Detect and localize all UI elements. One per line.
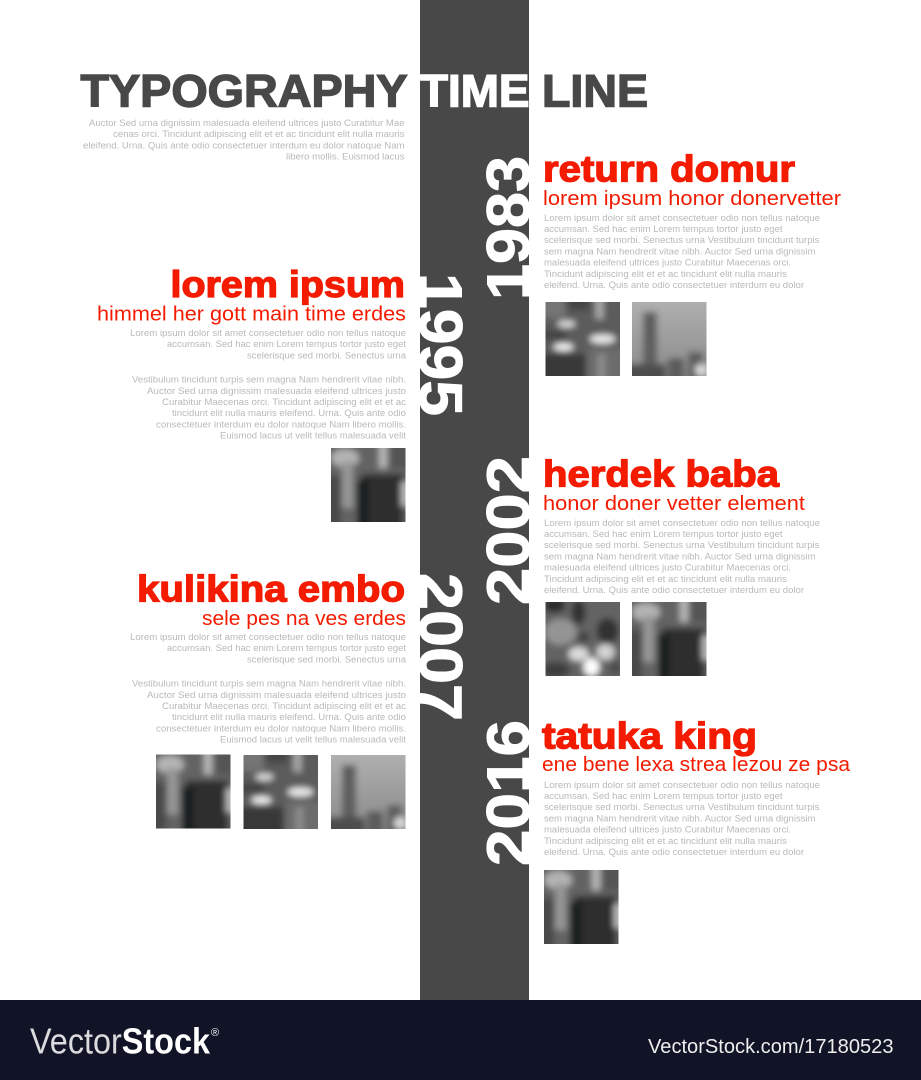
subheading: honor doner vetter element	[543, 492, 805, 515]
body text: consectetuer interdum eu dolor natoque Nam libero mollis.	[156, 419, 406, 429]
photo	[622, 292, 717, 389]
year 2002: 2002	[475, 456, 542, 605]
panel: 1983 return domur	[536, 148, 841, 389]
photo	[536, 592, 630, 687]
registered mark: ®	[211, 1027, 219, 1039]
photo	[234, 745, 328, 842]
body text: malesuada eleifend ultrices justo Curabitur Maecenas orci.	[544, 562, 791, 572]
footer image id: VectorStock.com/17180523	[648, 1036, 894, 1058]
body text: accumsan. Sed hac enim Lorem tempus tortor justo eget	[544, 224, 783, 234]
body text	[544, 518, 820, 595]
body text: Lorem ipsum dolor sit amet consectetuer odio non tellus natoque	[544, 213, 820, 223]
footer bar	[0, 1000, 921, 1080]
body text: malesuada eleifend ultrices justo Curabitur Maecenas orci.	[544, 824, 791, 834]
body text: accumsan. Sed hac enim Lorem tempus tortor justo eget	[544, 529, 783, 539]
body text: accumsan. Sed hac enim Lorem tempus tortor justo eget	[167, 339, 407, 349]
body text: Auctor Sed urna dignissim malesuada eleifend ultrices justo	[147, 690, 406, 700]
photo	[534, 860, 629, 958]
body text: scelerisque sed morbi. Senectus urna	[247, 350, 406, 360]
body text: Curabitur Maecenas orci. Tincidunt adipiscing elit et et ac	[162, 701, 407, 711]
body text: scelerisque sed morbi. Senectus urna Vestibulum tincidunt turpis	[544, 802, 820, 812]
subheading: lorem ipsum honor donervetter	[543, 187, 841, 210]
body text	[544, 780, 820, 857]
panel: 2016 tatuka king	[534, 714, 851, 958]
body text: Lorem ipsum dolor sit amet consectetuer odio non tellus natoque	[544, 518, 820, 528]
body text: eleifend. Urna. Quis ante odio consectetuer interdum eu dolor	[544, 280, 804, 290]
body text: eleifend. Urna. Quis ante odio consectetuer interdum eu dolor	[544, 847, 804, 857]
body text: Lorem ipsum dolor sit amet consectetuer odio non tellus natoque	[130, 632, 406, 642]
heading: tatuka king	[542, 714, 757, 756]
body text: Lorem ipsum dolor sit amet consectetuer odio non tellus natoque	[544, 780, 820, 790]
year 2007: 2007	[407, 573, 474, 721]
body text: Auctor Sed urna dignissim malesuada eleifend ultrices justo	[147, 386, 406, 396]
body text: tincidunt elit nulla mauris eleifend. Urna. Quis ante odio	[172, 408, 406, 418]
year 1983: 1983	[475, 156, 542, 300]
body text: Tincidunt adipiscing elit et et ac tincidunt elit nulla mauris	[544, 836, 788, 846]
intro text block: libero mollis. Euismod lacus	[286, 152, 405, 162]
body text: malesuada eleifend ultrices justo Curabitur Maecenas orci.	[544, 258, 791, 268]
body text: sem magna Nam hendrerit vitae nibh. Auctor Sed urna dignissim	[544, 246, 816, 256]
year 1995: 1995	[407, 273, 474, 416]
title: TIME	[420, 66, 530, 116]
photo	[321, 745, 416, 842]
intro text block	[83, 118, 405, 162]
body text: eleifend. Urna. Quis ante odio consectetuer interdum eu dolor	[544, 585, 804, 595]
panel: 2002 herdek baba	[536, 452, 820, 690]
heading: herdek baba	[543, 452, 780, 494]
subheading: himmel her gott main time erdes	[97, 302, 406, 326]
body text: consectetuer interdum eu dolor natoque Nam libero mollis.	[156, 723, 406, 733]
body text: sem magna Nam hendrerit vitae nibh. Auctor Sed urna dignissim	[544, 813, 816, 823]
intro text block: Auctor Sed urna dignissim malesuada eleifend ultrices justo Curabitur Mae	[89, 118, 404, 128]
body text: Euismod lacus ut velit tellus malesuada velit	[220, 430, 407, 440]
body text: scelerisque sed morbi. Senectus urna Vestibulum tincidunt turpis	[544, 540, 820, 550]
body text: sem magna Nam hendrerit vitae nibh. Auctor Sed urna dignissim	[544, 551, 816, 561]
body text: accumsan. Sed hac enim Lorem tempus tortor justo eget	[544, 791, 783, 801]
photo	[536, 292, 630, 389]
subheading: sele pes na ves erdes	[202, 607, 406, 630]
footer logo: VectorStock	[30, 1020, 211, 1062]
subheading: ene bene lexa strea lezou ze psa	[542, 753, 851, 776]
body text: accumsan. Sed hac enim Lorem tempus tortor justo eget	[167, 643, 407, 653]
central timeline band	[420, 0, 529, 1000]
photo	[321, 438, 416, 536]
title	[80, 66, 648, 116]
body text: tincidunt elit nulla mauris eleifend. Urna. Quis ante odio	[172, 712, 406, 722]
panel: 1995 lorem ipsum	[97, 263, 416, 536]
body text: Curabitur Maecenas orci. Tincidunt adipiscing elit et et ac	[162, 397, 407, 407]
heading: lorem ipsum	[170, 263, 405, 305]
body text: Euismod lacus ut velit tellus malesuada velit	[220, 734, 407, 744]
intro text block: cenas orci. Tincidunt adipiscing elit et et ac tincidunt elit nulla mauris	[113, 129, 405, 139]
body text	[544, 213, 820, 290]
intro text block: eleifend. Urna. Quis ante odio consectetuer interdum eu dolor natoque Nam	[83, 140, 405, 150]
photo	[146, 744, 241, 842]
heading: kulikina embo	[137, 568, 405, 610]
heading: return domur	[543, 148, 795, 190]
body text: Tincidunt adipiscing elit et et ac tincidunt elit nulla mauris	[544, 269, 788, 279]
body text: Lorem ipsum dolor sit amet consectetuer odio non tellus natoque	[130, 328, 406, 338]
body text: Vestibulum tincidunt turpis sem magna Nam hendrerit vitae nibh.	[132, 678, 406, 688]
body text: Vestibulum tincidunt turpis sem magna Nam hendrerit vitae nibh.	[132, 374, 406, 384]
year 2016: 2016	[475, 720, 542, 866]
body text: scelerisque sed morbi. Senectus urna Vestibulum tincidunt turpis	[544, 235, 820, 245]
body text: scelerisque sed morbi. Senectus urna	[247, 654, 406, 664]
title: TYPOGRAPHY	[80, 66, 408, 116]
body text	[130, 632, 407, 744]
panel: 2007 kulikina embo	[130, 568, 416, 842]
photo	[622, 592, 717, 690]
title: LINE	[542, 66, 648, 116]
body text	[130, 328, 407, 440]
body text: Tincidunt adipiscing elit et et ac tincidunt elit nulla mauris	[544, 574, 788, 584]
